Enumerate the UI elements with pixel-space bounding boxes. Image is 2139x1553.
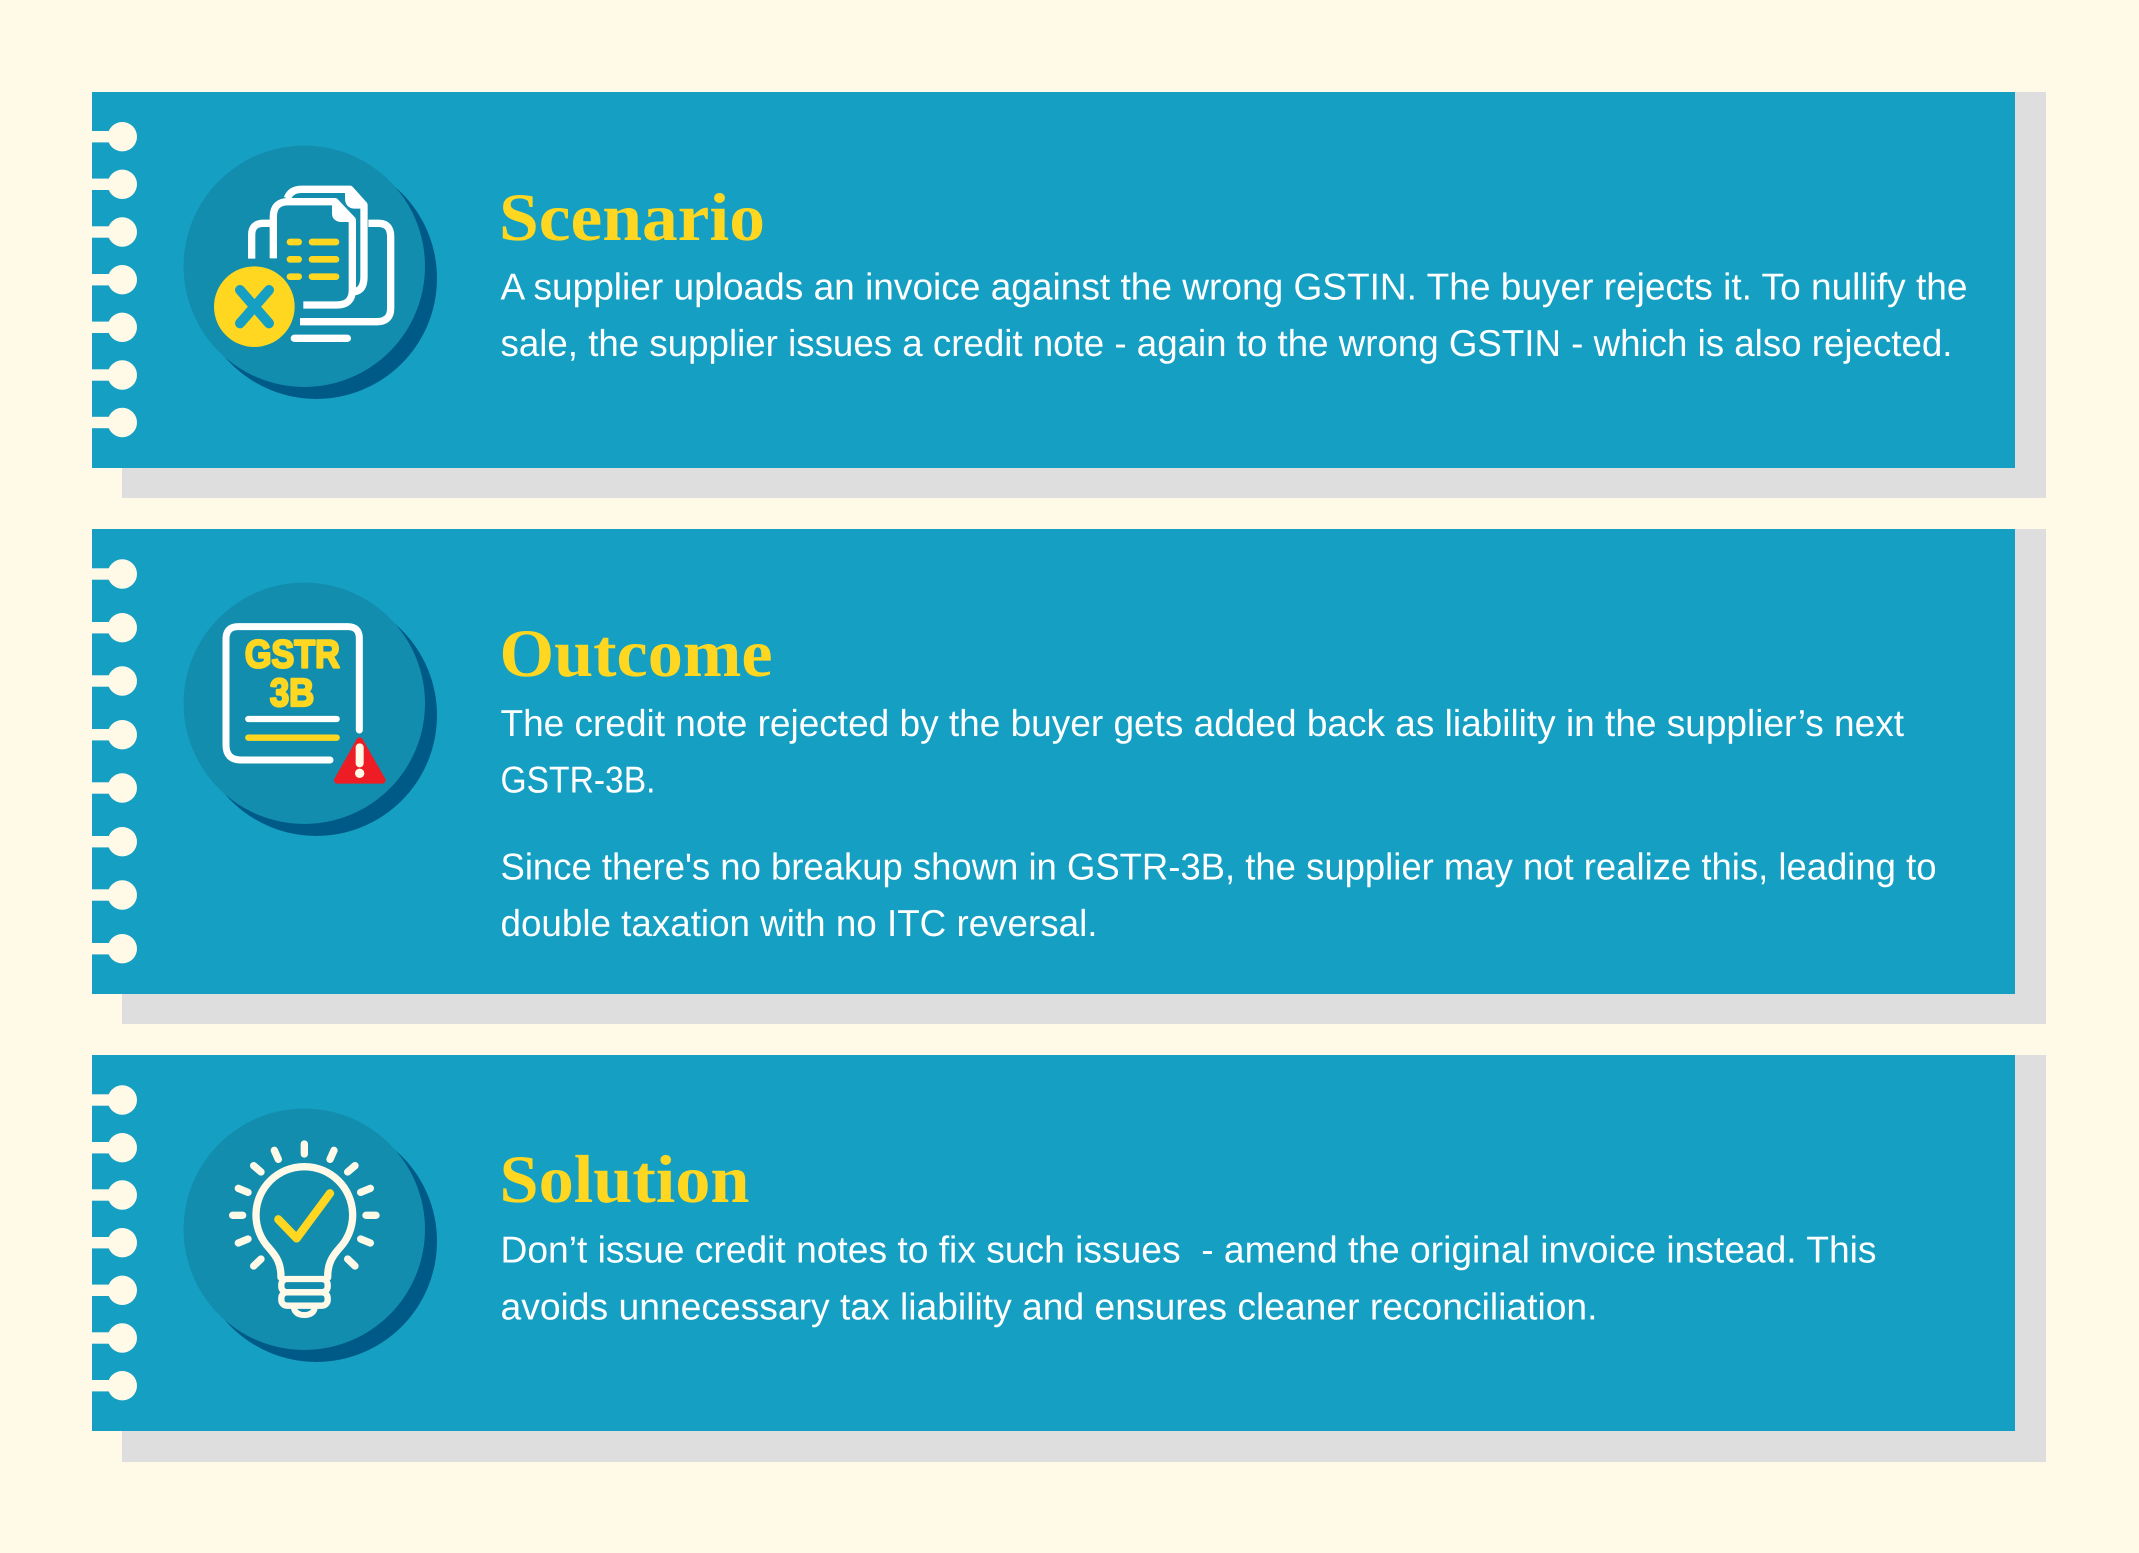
panel: scenario [92,92,2046,498]
icon: GSTR-3B form with warning: GSTR [245,632,340,676]
text: outcome description [500,702,1936,944]
heading: solution: Solution [500,1141,750,1217]
icon: GSTR-3B form with warning [184,583,437,836]
heading: scenario: Scenario [499,179,765,255]
text: solution description [500,1229,1876,1327]
text: outcome description: The credit note rejected by the buyer gets added back as liability in the supplier’s next [500,702,1905,744]
text: scenario description: A supplier uploads an invoice against the wrong GSTIN. The buyer rejects it. To nullify the [500,266,1968,308]
panel shadow [122,92,2046,498]
panel: outcome [92,529,2046,1024]
panel background [92,529,2015,994]
text: outcome description: Since there's no breakup shown in GSTR-3B, the supplier may not realize this, leading to [500,845,1936,887]
icon: light bulb with check mark [184,1109,437,1362]
icon: rejected documents [184,146,437,399]
panel background [92,92,2015,468]
notebook rings [92,1085,137,1400]
text: scenario description [500,266,1968,364]
text: scenario description: sale, the supplier issues a credit note - again to the wrong GSTIN - which is also rejected. [500,322,1952,364]
text: solution description: avoids unnecessary tax liability and ensures cleaner reconciliation. [500,1285,1598,1327]
panel shadow [122,529,2046,1024]
text: solution description: Don’t issue credit notes to fix such issues - amend the original invoice instead. This [500,1229,1876,1271]
icon: GSTR-3B form with warning: 3B [270,671,314,715]
panel: solution [92,1055,2046,1462]
text: outcome description: GSTR-3B. [500,759,656,801]
panel shadow [122,1055,2046,1462]
notebook rings [92,559,137,963]
panel background [92,1055,2015,1431]
heading: outcome: Outcome [500,615,772,691]
text: outcome description: double taxation with no ITC reversal. [500,902,1098,944]
notebook rings [92,122,137,437]
